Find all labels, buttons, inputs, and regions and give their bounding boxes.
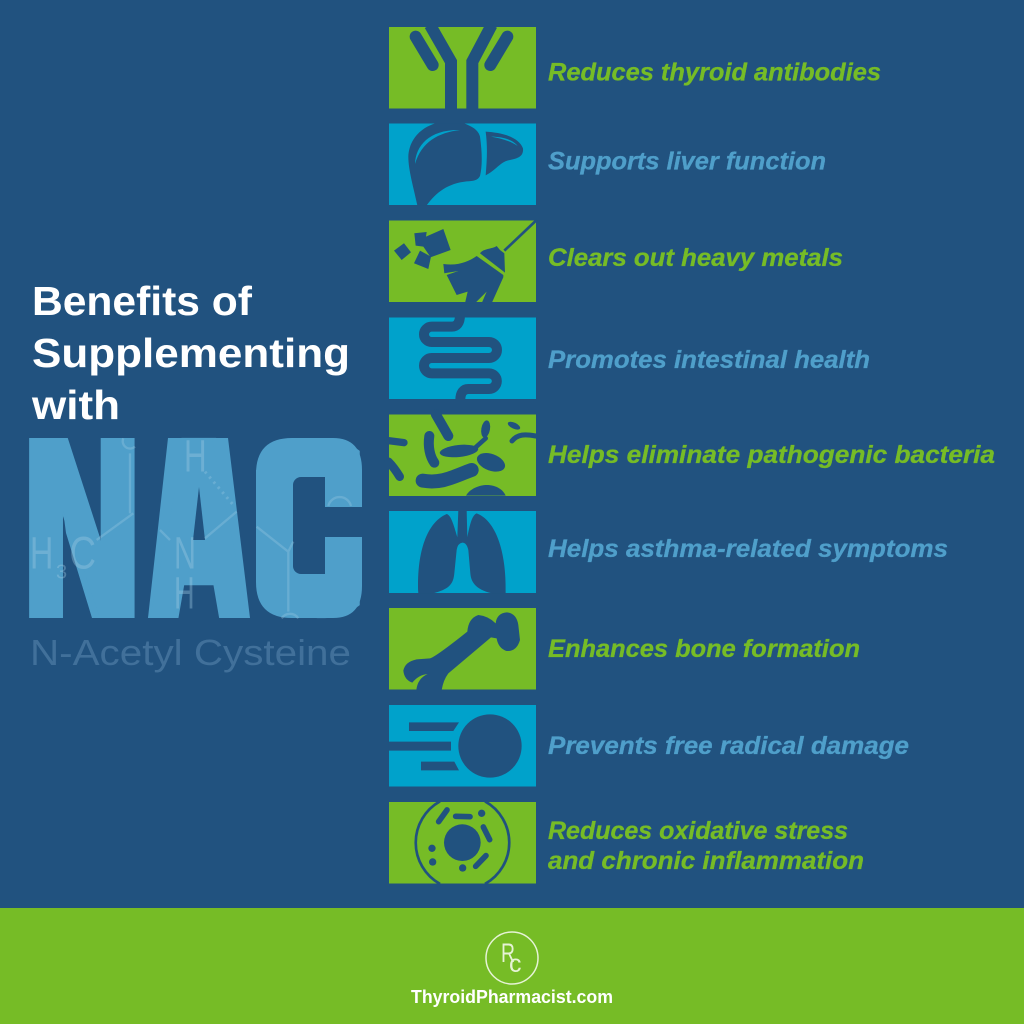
label: intestinal health: Promotes intestinal health: [548, 346, 870, 374]
panel: bone icon: [389, 608, 536, 690]
molecule watermark: C: [69, 527, 96, 578]
panel: antibody icon: [389, 25, 536, 110]
molecule watermark: 3: [56, 561, 67, 583]
logo: RC monogram: R: [501, 938, 515, 968]
title: [31, 278, 350, 428]
label: heavy metals: Clears out heavy metals: [548, 244, 843, 272]
logo: RC monogram: [486, 932, 538, 984]
label: bone formation: Enhances bone formation: [548, 635, 860, 663]
molecule watermark: H: [184, 431, 207, 482]
label: pathogenic bacteria: Helps eliminate pathogenic bacteria: [548, 441, 995, 469]
label: oxidative stress: [548, 817, 864, 875]
panel: free radical icon: [388, 705, 536, 786]
title: Supplementing: [32, 330, 350, 376]
molecule watermark: N: [174, 527, 196, 578]
molecule watermark: [30, 431, 351, 618]
NAC large lettering with molecule: C: [252, 395, 366, 672]
NAC large lettering with molecule: [19, 390, 366, 677]
panel: broom and metals icon: [389, 220, 537, 303]
molecule watermark: H: [30, 527, 53, 578]
label: thyroid antibodies: Reduces thyroid antibodies: [548, 58, 881, 86]
label: oxidative stress: Reduces oxidative stress: [548, 817, 848, 845]
title: with: [31, 382, 120, 428]
panel: cell icon: [389, 801, 536, 884]
panel: bacteria icon: [388, 414, 536, 496]
title: Benefits of: [32, 278, 252, 324]
label: liver function: Supports liver function: [548, 148, 826, 176]
molecule watermark: H: [174, 567, 195, 618]
label: free radical damage: Prevents free radical damage: [548, 732, 909, 760]
panel: lungs icon: [389, 510, 536, 593]
website: ThyroidPharmacist.com: [411, 987, 613, 1007]
NAC large lettering with molecule: A: [151, 390, 247, 677]
subtitle: N-Acetyl Cysteine: N-Acetyl Cysteine: [30, 632, 351, 673]
footer band: [0, 908, 1024, 1024]
label: oxidative stress: and chronic inflammation: [548, 847, 864, 875]
panel: liver icon: [389, 123, 536, 205]
panel: intestine icon: [389, 315, 536, 400]
logo: RC monogram: c: [509, 950, 522, 978]
letter weight adjustments: [63, 438, 362, 618]
label: asthma symptoms: Helps asthma-related symptoms: [548, 535, 948, 563]
NAC large lettering with molecule: N: [19, 390, 145, 677]
